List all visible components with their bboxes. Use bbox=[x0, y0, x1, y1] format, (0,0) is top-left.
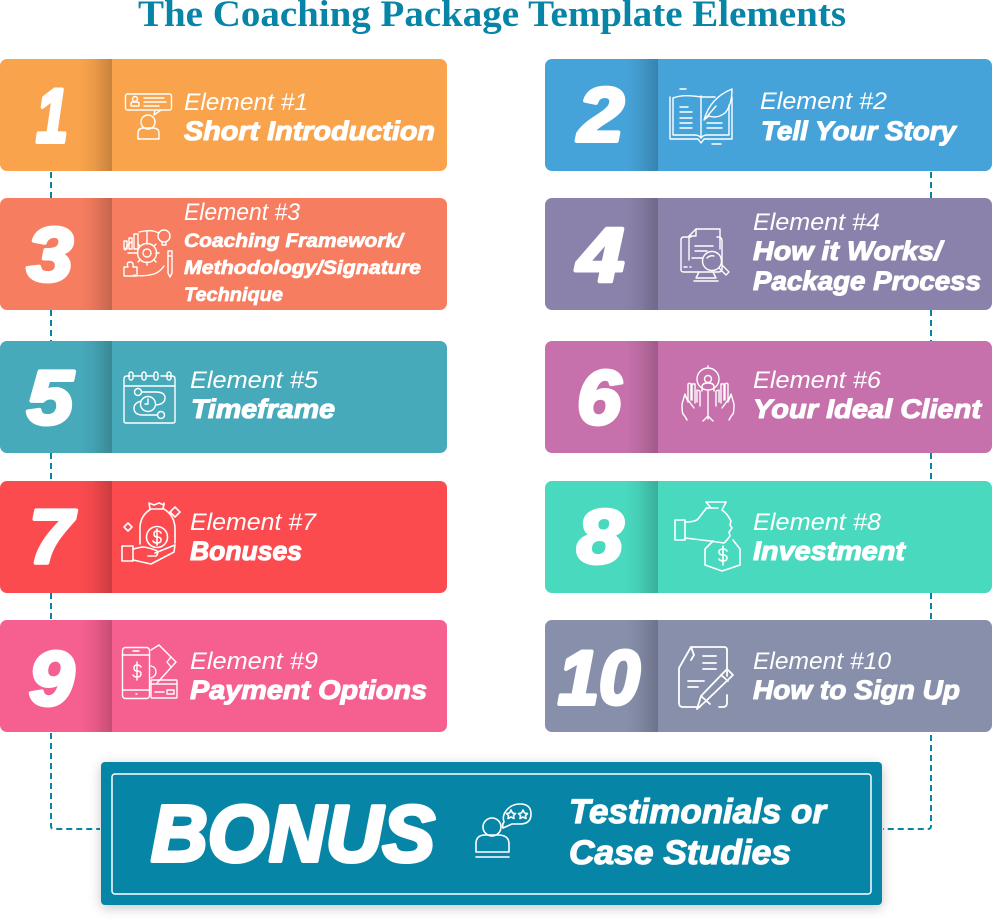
icon: calendar timeline bbox=[124, 372, 175, 423]
connector: right dashed line bbox=[883, 172, 931, 829]
heading: Payment Options bbox=[190, 675, 427, 705]
heading: Short Introduction bbox=[184, 116, 435, 146]
panel: element 2 bbox=[545, 59, 992, 171]
icon: phone, banknote and card bbox=[122, 645, 177, 698]
number 2: 2 bbox=[576, 73, 624, 158]
connector: left dashed line bbox=[51, 172, 100, 829]
heading lines: Technique bbox=[184, 285, 283, 306]
icon: person with star review bubble bbox=[476, 804, 531, 857]
heading lines bbox=[184, 231, 421, 306]
label: Element #6 bbox=[753, 367, 882, 394]
label: Element #2 bbox=[760, 88, 887, 115]
label: Element #4 bbox=[753, 209, 880, 236]
icon: contract and pencil bbox=[679, 647, 733, 709]
icon: book and quill bbox=[670, 89, 732, 144]
icon: hand gripping money bag bbox=[675, 502, 740, 571]
heading lines: Package Process bbox=[753, 266, 981, 296]
icon: money bag on hand bbox=[122, 503, 180, 564]
panel: element 4 bbox=[545, 198, 992, 310]
heading: Your Ideal Client bbox=[753, 394, 982, 424]
label: Element #9 bbox=[190, 648, 318, 675]
label: Element #7 bbox=[190, 509, 318, 536]
heading: Bonuses bbox=[190, 536, 302, 566]
label: Element #8 bbox=[753, 509, 882, 536]
number 8: 8 bbox=[577, 495, 624, 580]
heading lines bbox=[753, 236, 981, 296]
bonus text lines bbox=[569, 793, 828, 872]
number 3: 3 bbox=[27, 213, 73, 298]
number 9: 9 bbox=[29, 637, 74, 722]
heading: Timeframe bbox=[191, 394, 335, 424]
panel: element 1 bbox=[0, 59, 447, 171]
label: Element #10 bbox=[753, 648, 892, 675]
icon: framework gear bbox=[124, 230, 172, 277]
panel: bonus bbox=[101, 762, 882, 905]
panel: element 8 bbox=[545, 481, 992, 593]
heading lines: How it Works/ bbox=[753, 236, 945, 266]
bonus text lines: Case Studies bbox=[569, 834, 791, 872]
heading: Investment bbox=[753, 536, 906, 566]
number 7: 7 bbox=[29, 495, 77, 580]
number 1: 1 bbox=[36, 74, 68, 159]
heading lines: Coaching Framework/ bbox=[184, 231, 405, 252]
label: Element #5 bbox=[190, 367, 319, 394]
panel: element 5 bbox=[0, 341, 447, 453]
number 4: 4 bbox=[575, 213, 624, 298]
number 6: 6 bbox=[577, 356, 622, 441]
number 10: 10 bbox=[558, 636, 640, 721]
heading lines: Methodology/Signature bbox=[184, 258, 421, 279]
number 5: 5 bbox=[27, 356, 75, 441]
panel: element 10 bbox=[545, 620, 992, 732]
heading: Tell Your Story bbox=[761, 116, 958, 146]
bonus heading: BONUS bbox=[151, 789, 435, 878]
icon: document and magnifier on monitor bbox=[681, 229, 729, 281]
panel: element 6 bbox=[545, 341, 992, 453]
label: Element #3 bbox=[184, 199, 301, 226]
panel: element 9 bbox=[0, 620, 447, 732]
panel: element 7 bbox=[0, 481, 447, 593]
icon: hands holding person bbox=[682, 366, 734, 421]
heading: How to Sign Up bbox=[753, 675, 960, 705]
bonus text lines: Testimonials or bbox=[569, 793, 828, 831]
icon: speech card and person bbox=[126, 94, 172, 139]
panel: element 3 bbox=[0, 198, 447, 310]
label: Element #1 bbox=[184, 89, 308, 116]
